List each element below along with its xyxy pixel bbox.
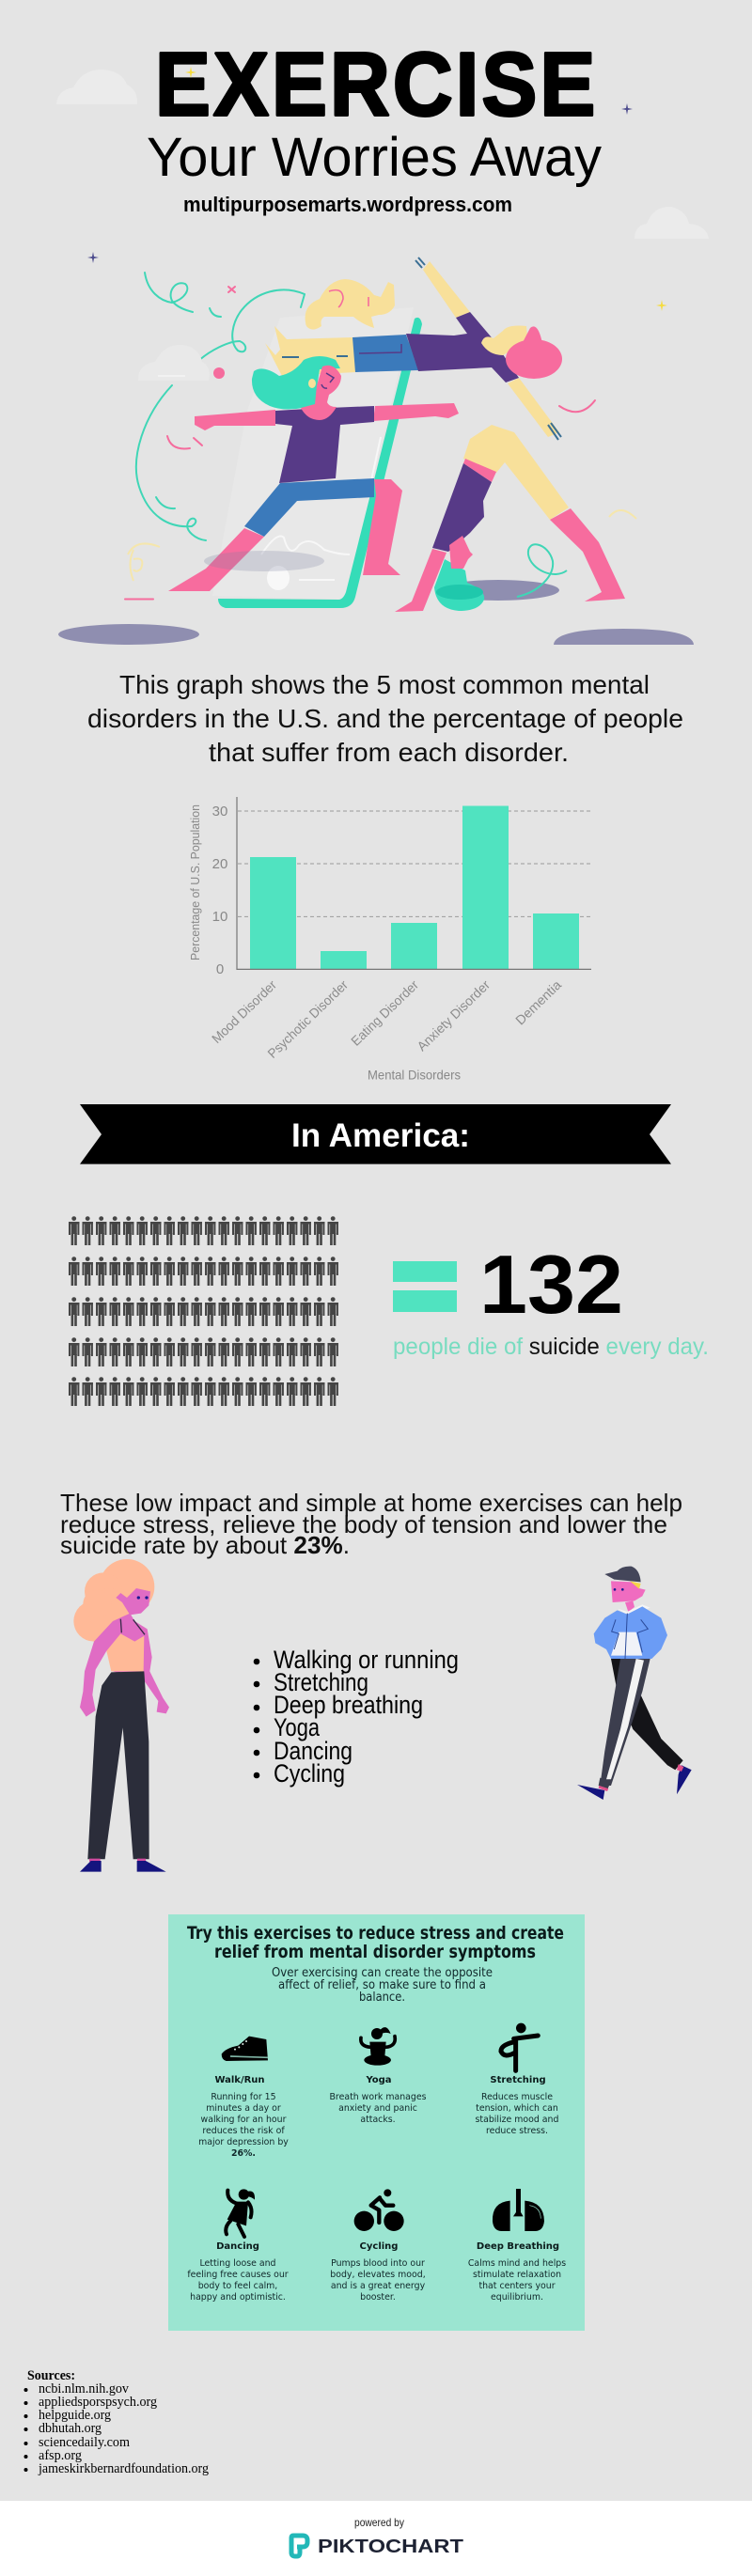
panel subheading: affect of relief, so make sure to find a [278,1977,486,1992]
icon: shoe [222,2037,268,2061]
footer: powered by Piktochart: PIKTOCHART [318,2537,463,2557]
icon: piktochart logo [291,2536,307,2556]
figure: top lying person [265,258,562,440]
sources list: dbhutah.org [39,2421,102,2436]
bulleted exercise list: Walking or running [274,1646,459,1674]
panel subheading [272,1965,493,2005]
doodle lines [136,273,305,540]
card text: yoga: attacks. [360,2115,396,2125]
exercise paragraph [60,1489,682,1559]
sources list: afsp.org [39,2448,82,2463]
title: EXERCISE: EXERCISE [155,34,595,134]
panel heading: Try this exercises to reduce stress and create [187,1923,564,1944]
exercise paragraph: reduce stress, relieve the body of tension and lower the [60,1510,667,1538]
card text: cycling: body, elevates mood, [330,2270,426,2280]
card text: deep breathing: stimulate relaxation [473,2270,561,2280]
sources list: helpguide.org [39,2408,111,2423]
card labels row 2: Dancing [216,2241,259,2252]
panel heading: relief from mental disorder symptoms [214,1942,536,1962]
exercise paragraph: suicide rate by about 23%. [60,1531,350,1559]
cat [306,279,395,330]
website: multipurposemarts.wordpress.com [183,193,512,216]
card text: dancing: feeling free causes our [187,2270,289,2280]
exercise paragraph: These low impact and simple at home exercises can help [60,1489,682,1517]
card text: dancing [187,2258,289,2303]
card text: walk/run: walking for an hour [201,2115,287,2125]
card text: dancing: body to feel calm, [198,2281,277,2291]
figure: downward dog person [395,425,625,612]
card text: cycling: and is a great energy [331,2281,426,2291]
card text: stretching: reduce stress. [486,2126,548,2136]
sources list: sciencedaily.com [39,2435,131,2450]
y axis title: Percentage of U.S. Population [188,804,202,960]
icon: cycling [354,2189,404,2231]
axis tick labels: 10 [212,909,227,925]
card text: walk/run: Running for 15 [211,2092,276,2102]
cloud and phone screen [138,345,210,381]
card text: deep breathing [468,2258,566,2303]
star on title [185,67,196,78]
phone frame [218,318,422,608]
illustration: walking man [577,1567,692,1800]
translucent shadow over warrior leg [204,551,324,571]
illustration: standing woman [73,1559,169,1872]
axis tick labels [212,804,227,977]
intro paragraph: that suffer from each disorder. [209,738,569,767]
card text: yoga: anxiety and panic [338,2103,417,2114]
sources list: ncbi.nlm.nih.gov [39,2381,130,2396]
icon: equals sign [393,1261,457,1312]
bars [250,806,579,969]
icon: lungs [493,2189,544,2231]
card text: stretching: stabilize mood and [476,2115,558,2125]
axis tick labels: 30 [212,804,227,820]
x axis category labels: Psychotic Disorder [264,976,351,1061]
footer: powered by Piktochart [0,2501,752,2576]
card labels row 2 [216,2241,559,2252]
sources list: appliedsporspsych.org [39,2395,157,2410]
sources list: jameskirkbernardfoundation.org [38,2461,209,2476]
banner: In America [80,1104,671,1164]
figure: warrior pose person [168,356,459,591]
card text: deep breathing: Calms mind and helps [468,2258,566,2269]
panel: try this exercises [168,1914,585,2331]
x axis category labels: Eating Disorder [348,976,421,1049]
card labels row 2: Deep Breathing [477,2241,559,2252]
subtitle: Your Worries Away: Your Worries Away [147,127,602,188]
x axis title: Mental Disorders [368,1068,461,1083]
card labels row 2: Cycling [360,2241,398,2252]
axis tick labels: 0 [216,961,224,977]
sources list [24,2368,209,2476]
card text: cycling: booster. [360,2292,396,2303]
card text: yoga [329,2092,427,2125]
card text: yoga: Breath work manages [329,2092,427,2102]
bulleted exercise list: Deep breathing [274,1691,423,1719]
card labels row 1 [214,2075,546,2085]
x axis category labels: Mood Disorder [209,976,279,1046]
intro paragraph: disorders in the U.S. and the percentage of people [87,704,683,733]
panel subheading: Over exercising can create the opposite [272,1965,493,1980]
panel heading [187,1923,564,1962]
card text: deep breathing: that centers your [478,2281,556,2291]
icon: dancing [226,2189,255,2237]
card text: walk/run: major depression by [198,2137,289,2147]
icon: yoga [361,2027,395,2066]
axis tick labels: 20 [212,856,227,872]
card text: walk/run: minutes a day or [206,2103,281,2114]
ground shadows [58,624,694,645]
x axis category labels: Anxiety Disorder [414,976,493,1054]
bulleted exercise list: Dancing [274,1737,352,1765]
card text: dancing: happy and optimistic. [190,2292,286,2303]
icon: grid of people [69,1216,338,1406]
x axis category labels [209,976,564,1061]
statistic: 132: 132 [479,1238,623,1331]
illustration: three figures doing yoga [58,258,694,645]
card labels row 1: Stretching [490,2075,546,2085]
card labels row 1: Walk/Run [214,2075,265,2085]
sources list: Sources: [27,2368,75,2383]
footer: powered by Piktochart: powered by [354,2516,404,2529]
card text: stretching [476,2092,558,2136]
card text: dancing: Letting loose and [199,2258,276,2269]
card text: stretching: tension, which can [476,2103,558,2114]
panel subheading: balance. [359,1990,405,2005]
bulleted exercise list: Cycling [274,1759,345,1788]
card labels row 1: Yoga [365,2075,392,2085]
card text: cycling: Pumps blood into our [331,2258,425,2269]
banner: In America: In America: [291,1117,470,1154]
card text: stretching: Reduces muscle [481,2092,553,2102]
bulleted exercise list: Stretching [274,1668,368,1696]
card text: walk/run [198,2092,289,2159]
card text: deep breathing: equilibrium. [491,2292,543,2303]
bulleted exercise list: Yoga [274,1713,321,1741]
bar chart: mental disorders [188,797,591,1083]
statistic caption: people die of suicide every day. [393,1334,709,1360]
x axis category labels: Dementia [512,977,564,1028]
card text: walk/run: reduces the risk of [202,2126,285,2136]
icon: stretching [501,2023,538,2070]
card text: walk/run: 26%. [231,2148,256,2159]
card text: cycling [330,2258,426,2303]
background clouds and stars [56,70,709,311]
intro paragraph: This graph shows the 5 most common mental [119,670,650,699]
intro paragraph [87,670,683,767]
bulleted exercise list [254,1646,459,1788]
